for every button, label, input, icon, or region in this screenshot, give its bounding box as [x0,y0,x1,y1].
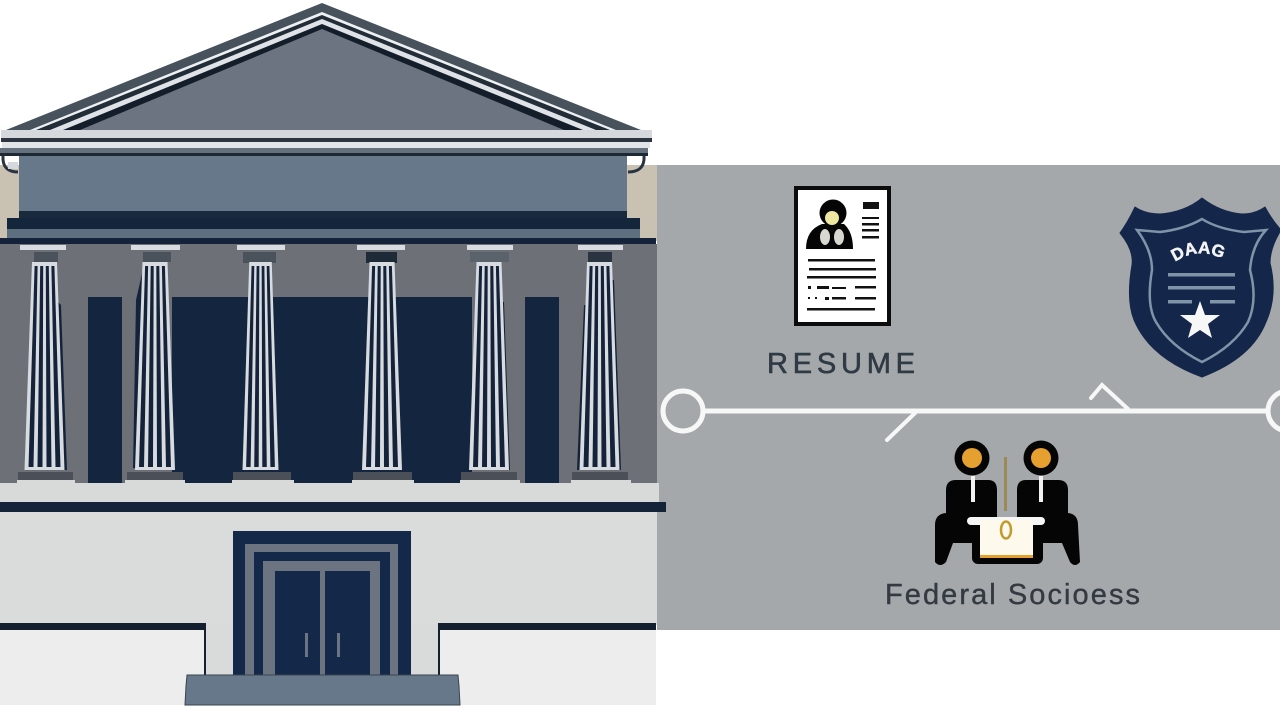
courthouse building [0,3,666,705]
federal label: Federal Socioess [885,579,1140,611]
entrance door [233,531,411,676]
badge lettering: DAAG [1170,242,1224,262]
badge star [1180,301,1220,338]
left official [935,440,997,565]
colonnade wall [0,244,657,484]
column 2 [125,245,185,484]
text lines [807,202,879,310]
cornice [0,130,652,172]
column 6 [571,245,631,484]
lower wall [0,512,657,625]
pen and seal [1001,457,1011,538]
icon: shield badge [1120,198,1280,378]
dark openings [88,297,559,483]
right panel background [657,165,1280,630]
frieze [19,156,627,211]
table [967,517,1045,564]
badge lines [1168,273,1235,304]
column 3 [232,245,294,484]
right wing [438,623,656,705]
icon: resume document [796,188,889,324]
icon: two officials at a table [935,440,1080,565]
entablature bands [0,211,656,244]
column 4 [352,245,414,484]
pediment roof [6,3,641,130]
beige backdrop behind frieze [0,165,657,245]
right official [1017,440,1080,565]
left wing [0,623,206,705]
entrance steps [185,675,460,705]
timeline [663,385,1280,440]
center bay [205,625,439,677]
person portrait [806,200,853,249]
column 1 [17,245,75,484]
stylobate band [0,483,666,512]
column 5 [460,245,520,484]
resume label: RESUME [767,348,915,380]
